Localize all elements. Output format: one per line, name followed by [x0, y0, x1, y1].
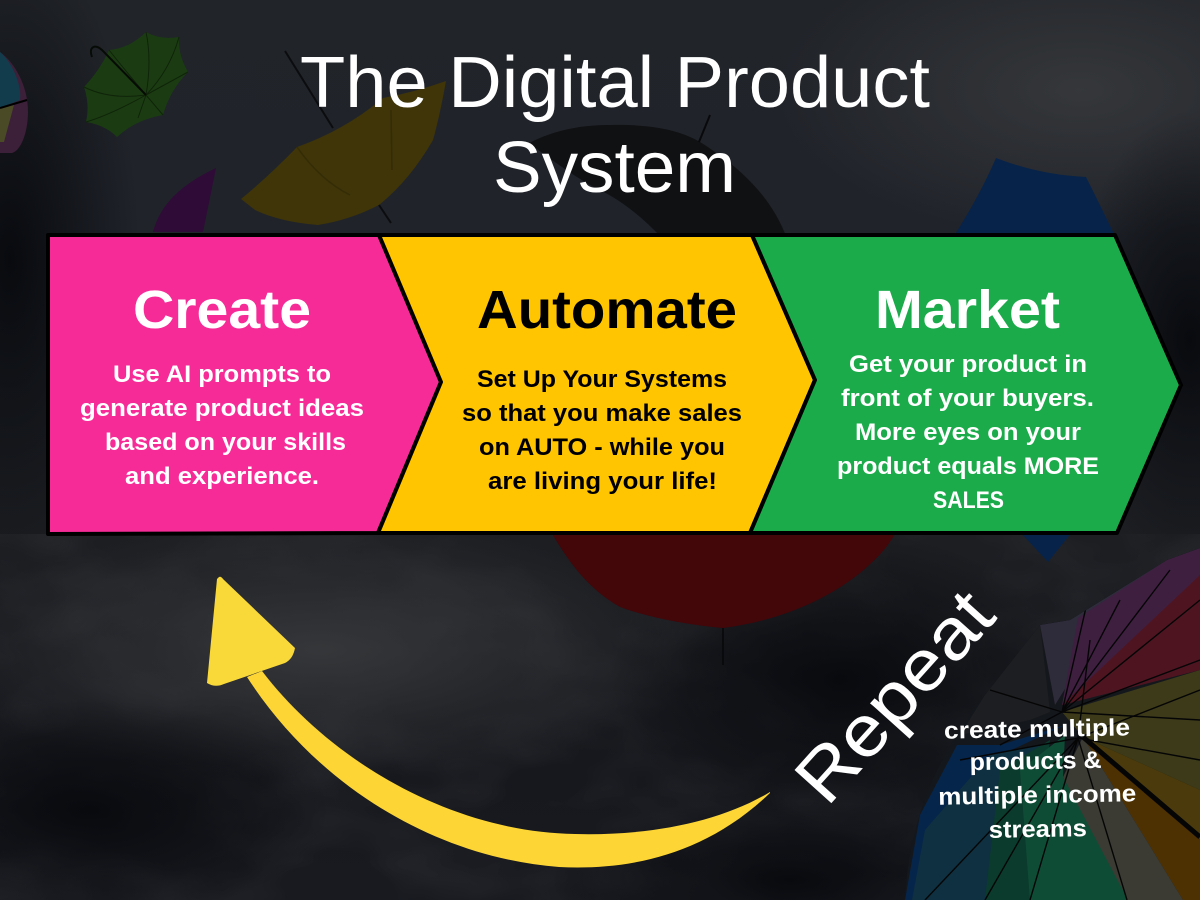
umbrella: purple [153, 168, 216, 232]
text: multiple products note: products & [969, 747, 1102, 776]
text: automate description [462, 366, 742, 495]
process chevrons [48, 235, 1181, 534]
umbrella: blue [954, 158, 1115, 562]
arrow: repeat loop back to create [207, 577, 770, 867]
text: multiple products note: streams [989, 815, 1087, 844]
umbrella: large rainbow [900, 545, 1200, 900]
text: automate description: on AUTO - while you [479, 434, 725, 461]
title: The Digital Product [300, 43, 930, 123]
text: multiple products note [937, 714, 1137, 845]
text: market description [837, 351, 1099, 514]
umbrella: yellow [241, 51, 446, 225]
text: market description: Get your product in [849, 351, 1087, 378]
text: multiple products note: create multiple [944, 714, 1130, 745]
umbrella: red [550, 530, 897, 665]
panel: automate [378, 235, 815, 533]
text: create description: Use AI prompts to [113, 361, 331, 388]
text: multiple products note: multiple income [938, 780, 1136, 811]
text: create description: based on your skills [105, 429, 346, 456]
label: repeat: Repeat [779, 575, 1010, 819]
heading: create: Create [133, 280, 311, 340]
title: System [493, 128, 736, 208]
umbrella: black [529, 115, 786, 236]
panel: create [48, 235, 441, 534]
heading: automate: Automate [477, 280, 737, 340]
text: automate description: Set Up Your Systems [477, 366, 727, 393]
text: automate description: so that you make sales [462, 400, 742, 427]
heading: market: Market [875, 280, 1060, 340]
text: create description [80, 361, 364, 490]
text: create description: generate product ideas [80, 395, 364, 422]
text: automate description: are living your life! [488, 468, 717, 495]
umbrella: green [84, 32, 188, 137]
umbrella: left rainbow fragment [0, 52, 28, 153]
title [300, 43, 930, 208]
text: market description: More eyes on your [855, 419, 1081, 446]
text: create description: and experience. [125, 463, 319, 490]
panel: market [750, 235, 1181, 533]
text: market description: front of your buyers. [841, 385, 1094, 412]
text: market description: product equals MORE [837, 453, 1099, 480]
text: market description: SALES [933, 487, 1004, 514]
